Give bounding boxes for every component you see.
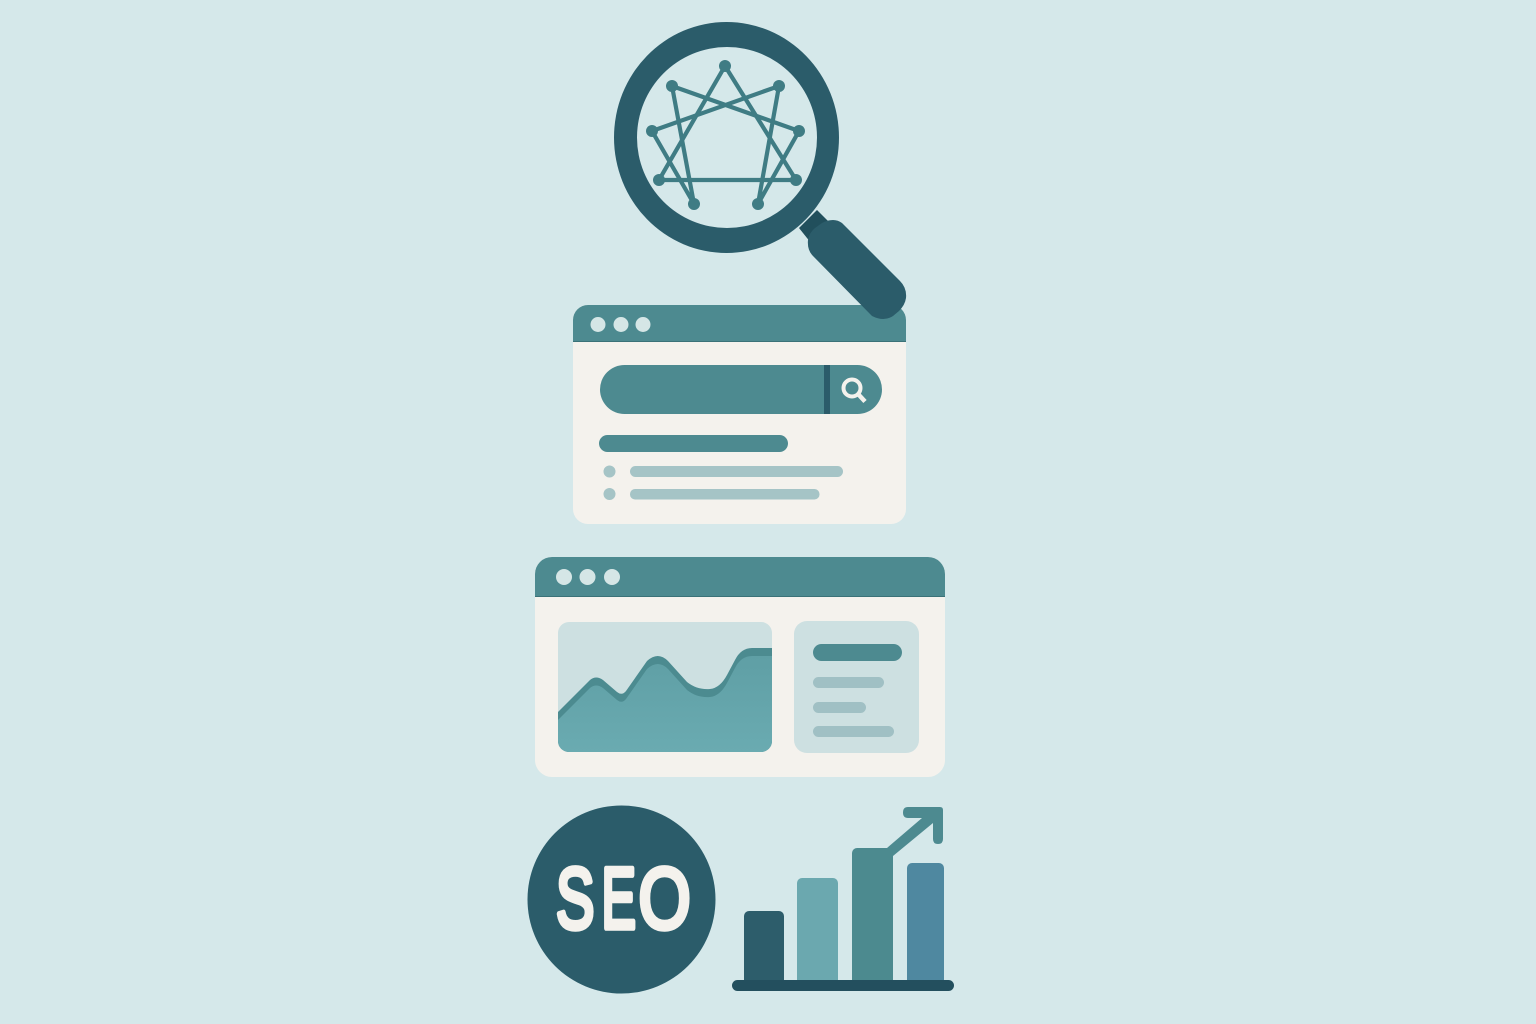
window body	[573, 305, 906, 524]
side panel	[794, 621, 919, 753]
bar 1	[744, 911, 784, 980]
chart baseline	[732, 980, 954, 991]
SEO label: O	[639, 851, 691, 947]
magnifier handle	[799, 210, 906, 319]
SEO label: S	[556, 851, 594, 947]
search bar	[600, 365, 882, 414]
bar 4	[907, 863, 944, 980]
window dots	[556, 569, 620, 585]
icon: magnifying glass with enneagram	[614, 22, 906, 319]
icon: SEO badge	[528, 806, 716, 994]
magnifier lens ring	[614, 22, 839, 253]
bar chart with growth arrow	[732, 807, 954, 991]
window dots	[590, 317, 650, 332]
result heading bar	[599, 435, 788, 452]
panel: analytics browser window	[535, 557, 945, 777]
SEO label: E	[602, 851, 636, 947]
window body	[535, 557, 945, 777]
window title bar	[573, 305, 906, 342]
bar 2	[797, 878, 838, 980]
window title bar	[535, 557, 945, 597]
panel: search browser window	[573, 305, 906, 524]
bar 3	[852, 848, 893, 980]
area chart	[558, 622, 772, 752]
result list	[604, 466, 843, 500]
growth arrow	[887, 807, 943, 856]
icon: search glass	[844, 380, 865, 402]
enneagram diagram	[646, 60, 805, 210]
